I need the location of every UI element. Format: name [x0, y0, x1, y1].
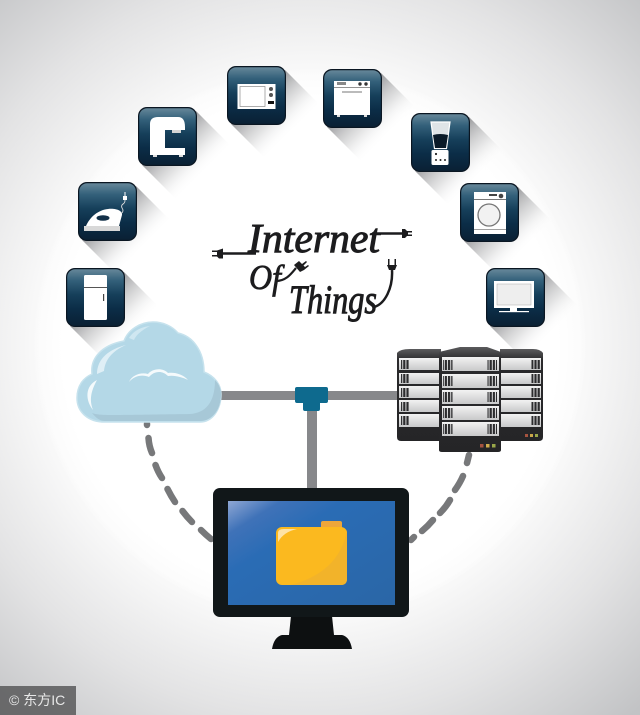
server: center unit: [439, 347, 501, 452]
connector bars: [218, 391, 400, 490]
icon: microwave tile: [227, 66, 321, 160]
plug head: right: [402, 229, 412, 238]
cloud highlight top: [129, 326, 150, 340]
plug head: left: [212, 248, 223, 258]
cloud inner arc: [129, 369, 188, 382]
plug wire: left: [221, 252, 256, 255]
server: right unit: [500, 349, 543, 441]
folder icon: [276, 521, 347, 585]
connector dashes: cloud to monitor: [147, 424, 211, 539]
plug head: Of: [294, 261, 309, 272]
monitor screen: [228, 501, 395, 605]
title: Internet Of Things: [212, 215, 412, 322]
plug wire: Things: [374, 270, 392, 307]
network junction: [295, 387, 328, 411]
plug wire: right: [372, 232, 404, 235]
monitor frame: [213, 488, 409, 617]
connector dashes: server to monitor: [411, 455, 469, 540]
watermark: [0, 686, 76, 715]
icon: washing machine tile: [460, 183, 554, 277]
icon: blender tile: [411, 113, 505, 207]
icon: television tile: [486, 268, 580, 362]
icon: iron tile: [78, 182, 172, 276]
icon: fridge tile: [66, 268, 160, 362]
cloud highlight left: [87, 380, 97, 410]
cloud highlight upper: [97, 345, 126, 374]
icon: oven tile: [323, 69, 417, 163]
plug head: Things: [387, 259, 397, 270]
monitor stand: [272, 616, 352, 649]
plug wire: Of: [276, 268, 296, 281]
watermark: © 东方IC: [9, 692, 65, 708]
server: left unit: [397, 349, 441, 441]
cloud shading: [92, 380, 221, 421]
cloud: [77, 322, 221, 422]
monitor: [213, 488, 409, 649]
heading word: Of: Of: [249, 258, 285, 297]
heading word: Things: Things: [289, 277, 377, 322]
heading word: Internet: Internet: [247, 215, 382, 261]
icon: coffee machine tile: [138, 107, 232, 201]
